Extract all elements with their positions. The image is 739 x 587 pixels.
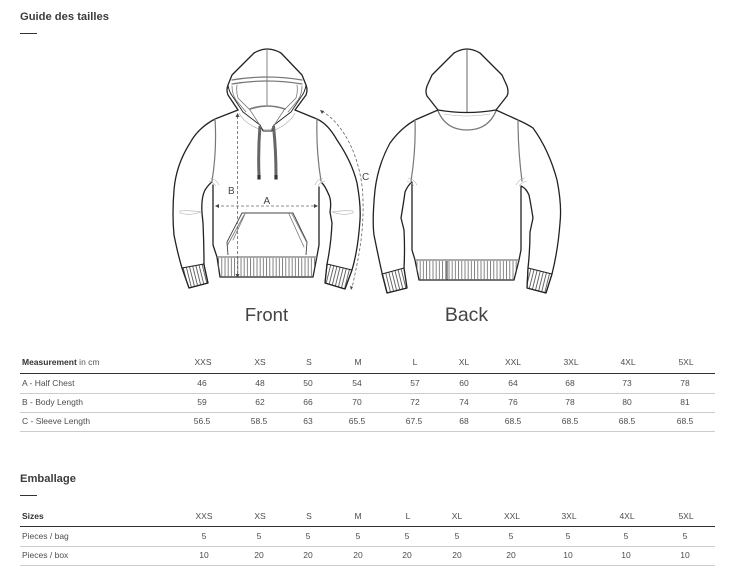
row: pieces per bag: 5 (306, 531, 311, 541)
body and sleeves (173, 110, 360, 289)
row: half chest: 48 (255, 378, 265, 388)
back body and sleeves (373, 110, 561, 293)
table header row: 3XL (563, 357, 579, 367)
row: pieces per bag: 5 (509, 531, 514, 541)
row: pieces per box: 20 (402, 550, 412, 560)
row: half chest: 50 (303, 378, 313, 388)
row: pieces per bag: 5 (683, 531, 688, 541)
packaging header row: XS (254, 511, 266, 521)
row: half chest: 64 (508, 378, 518, 388)
heading: Emballage: Emballage (20, 473, 76, 485)
row: pieces per bag: Pieces / bag (22, 531, 69, 541)
row: body length: 62 (255, 397, 265, 407)
packaging header row: 5XL (678, 511, 694, 521)
measure C: sleeve length (320, 110, 369, 290)
row: pieces per box: 20 (254, 550, 264, 560)
table header row: XXS (194, 357, 212, 367)
row: body length: 78 (565, 397, 575, 407)
heading: Guide des tailles (20, 11, 109, 34)
packaging header row: S (306, 511, 312, 521)
size table (20, 357, 715, 432)
table header row: XS (254, 357, 266, 367)
row: half chest (22, 378, 690, 388)
row: body length: 81 (680, 397, 690, 407)
table header row: XL (459, 357, 469, 367)
packaging header row (22, 511, 694, 521)
row: sleeve length: 67.5 (406, 416, 423, 426)
row: half chest: 57 (410, 378, 420, 388)
row: body length: B - Body Length (22, 397, 83, 407)
row: pieces per bag: 5 (405, 531, 410, 541)
measure C: sleeve length: C (362, 172, 369, 183)
row: pieces per bag (22, 531, 688, 541)
measure A: half chest: A (264, 196, 270, 207)
row: body length: 72 (410, 397, 420, 407)
row: half chest: 60 (459, 378, 469, 388)
row: half chest: 78 (680, 378, 690, 388)
row: half chest: 68 (565, 378, 575, 388)
table header row: 4XL (620, 357, 636, 367)
row: pieces per box: 20 (303, 550, 313, 560)
packaging header row: XXL (504, 511, 520, 521)
row: sleeve length: 58.5 (251, 416, 268, 426)
front hoodie illustration (173, 49, 369, 325)
row: pieces per box: Pieces / box (22, 550, 69, 560)
row: sleeve length (22, 416, 694, 426)
packaging header row: L (406, 511, 411, 521)
row: pieces per box: 20 (506, 550, 516, 560)
packaging header row: XXS (195, 511, 213, 521)
row: pieces per bag: 5 (624, 531, 629, 541)
table header row: Measurement in cm (22, 357, 99, 367)
label: Front: Front (245, 304, 288, 325)
row: sleeve length: 68 (459, 416, 469, 426)
row: sleeve length: 68.5 (677, 416, 694, 426)
row: body length: 76 (508, 397, 518, 407)
row: body length: 70 (352, 397, 362, 407)
row: sleeve length: C - Sleeve Length (22, 416, 90, 426)
row: pieces per box: 10 (199, 550, 209, 560)
packaging header row: Sizes (22, 511, 44, 521)
table header row: L (413, 357, 418, 367)
row: pieces per bag: 5 (202, 531, 207, 541)
row: pieces per bag: 5 (257, 531, 262, 541)
row: pieces per box: 10 (563, 550, 573, 560)
back hoodie illustration (373, 49, 561, 326)
drawstrings (259, 126, 276, 180)
packaging header row: 3XL (561, 511, 577, 521)
row: sleeve length: 63 (303, 416, 313, 426)
measure A: half chest (215, 196, 318, 208)
row: body length: 74 (459, 397, 469, 407)
hood (227, 49, 307, 131)
row: sleeve length: 56.5 (194, 416, 211, 426)
table header row: 5XL (678, 357, 694, 367)
heading: Emballage (20, 473, 76, 496)
row: pieces per box: 20 (353, 550, 363, 560)
row: half chest: 73 (622, 378, 632, 388)
packaging header row: XL (452, 511, 462, 521)
table header row: XXL (505, 357, 521, 367)
table header row: M (354, 357, 362, 367)
row: pieces per box: 20 (452, 550, 462, 560)
kangaroo pocket (227, 213, 307, 255)
label: Back: Back (445, 304, 488, 326)
hood back (426, 49, 508, 130)
row: sleeve length: 68.5 (505, 416, 522, 426)
row: pieces per box (22, 550, 690, 560)
measure B: body length (228, 113, 240, 278)
row: body length: 66 (303, 397, 313, 407)
row: pieces per box: 10 (680, 550, 690, 560)
row: body length: 59 (197, 397, 207, 407)
packaging header row: 4XL (619, 511, 635, 521)
row: pieces per bag: 5 (356, 531, 361, 541)
table header row: S (306, 357, 312, 367)
row: body length (22, 397, 690, 407)
measure B: body length: B (228, 186, 235, 197)
packaging table (20, 511, 715, 566)
row: pieces per bag: 5 (455, 531, 460, 541)
row: half chest: 54 (352, 378, 362, 388)
row: sleeve length: 68.5 (562, 416, 579, 426)
row: half chest: A - Half Chest (22, 378, 75, 388)
row: pieces per box: 10 (621, 550, 631, 560)
packaging header row: M (354, 511, 362, 521)
row: body length: 80 (622, 397, 632, 407)
row: half chest: 46 (197, 378, 207, 388)
row: sleeve length: 65.5 (349, 416, 366, 426)
row: sleeve length: 68.5 (619, 416, 636, 426)
table header row (22, 357, 694, 367)
heading: Guide des tailles: Guide des tailles (20, 11, 109, 23)
row: pieces per bag: 5 (566, 531, 571, 541)
